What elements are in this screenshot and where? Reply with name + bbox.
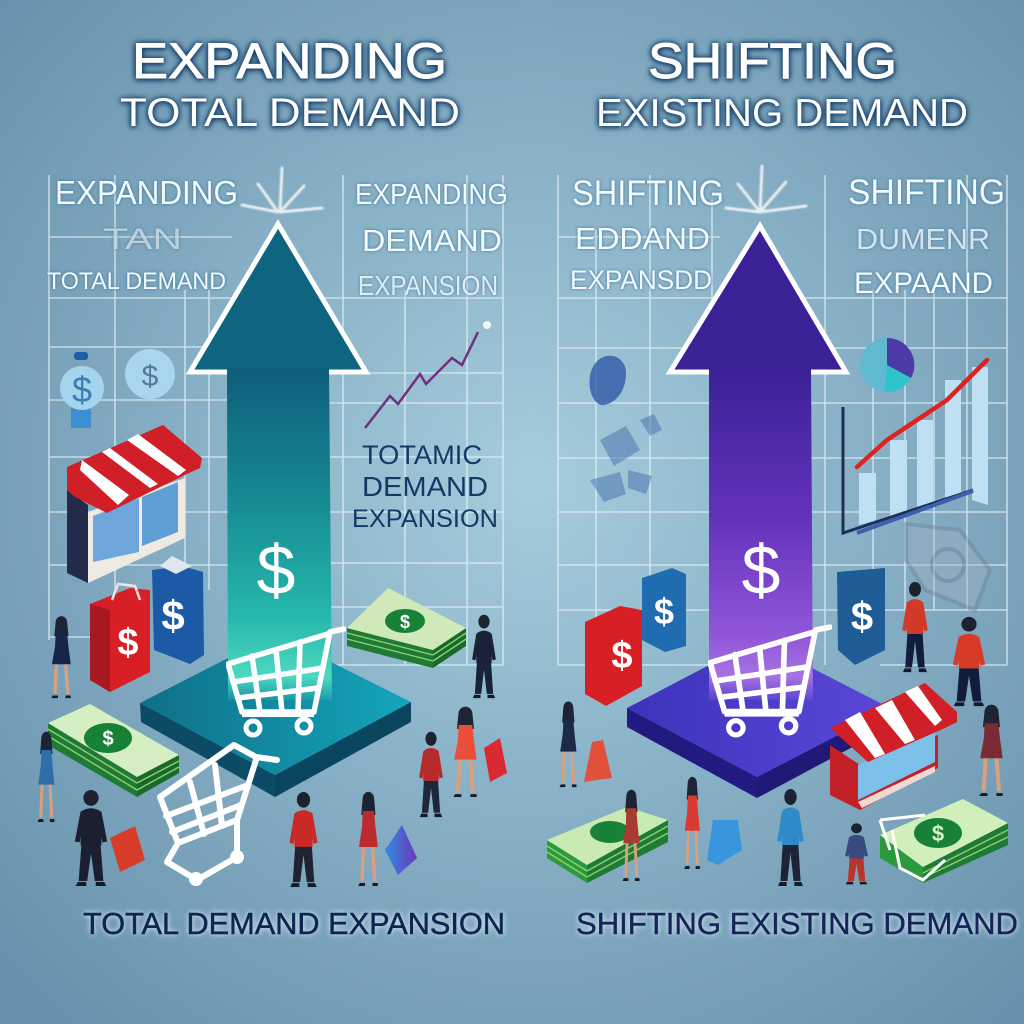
grid lines left xyxy=(49,175,1007,665)
text totamic demand expansion xyxy=(352,440,498,533)
title: shifting existing demand: EXISTING DEMAND xyxy=(596,92,968,135)
dollar signs on arrows xyxy=(257,531,780,609)
shifting panel labels: EDDAND xyxy=(575,221,710,256)
left cart large xyxy=(160,745,277,883)
faint icons right xyxy=(589,356,662,502)
icon: coin figure xyxy=(60,352,104,428)
bags left xyxy=(90,556,204,692)
left panel labels: TOTAL DEMAND xyxy=(47,268,226,295)
caption left: TOTAL DEMAND EXPANSION xyxy=(83,906,505,941)
bags left: $ xyxy=(161,592,185,639)
text totamic demand expansion: DEMAND xyxy=(362,471,488,502)
bags left: $ xyxy=(117,622,139,664)
shifting panel labels: SHIFTING xyxy=(572,174,724,213)
cash stack top xyxy=(347,588,466,668)
left panel labels xyxy=(47,174,238,295)
bags right: $ xyxy=(654,591,674,632)
carts on arrows xyxy=(228,627,830,735)
title: expanding total demand: TOTAL DEMAND xyxy=(120,91,460,135)
right-of-arrow labels right: DUMENR xyxy=(856,224,990,256)
platform right xyxy=(627,640,890,798)
bags right xyxy=(585,568,885,706)
shoppers left xyxy=(38,615,507,887)
dollar signs on arrows: $ xyxy=(257,531,295,609)
arrow right xyxy=(670,226,846,700)
cash stack top: $ xyxy=(400,612,410,632)
faint ghost icon xyxy=(906,524,990,610)
shifting panel labels: EXPANSDD xyxy=(570,265,712,295)
caption right: SHIFTING EXISTING DEMAND xyxy=(576,906,1018,941)
right-of-arrow labels right: SHIFTING xyxy=(848,173,1005,212)
right-of-arrow labels left: EXPANSION xyxy=(358,270,498,301)
shoppers right xyxy=(560,582,1003,886)
store right xyxy=(830,683,957,810)
left panel labels: TAN xyxy=(103,223,182,256)
icon: coin xyxy=(125,349,175,399)
cash stack right lower right: $ xyxy=(932,821,944,846)
dollar signs on arrows: $ xyxy=(742,531,780,609)
bags right: $ xyxy=(611,635,633,677)
cash stack right lower right xyxy=(880,799,1008,883)
right-of-arrow labels left xyxy=(355,179,508,301)
text totamic demand expansion: EXPANSION xyxy=(352,505,498,533)
title: shifting existing demand xyxy=(596,33,968,135)
left panel labels: EXPANDING xyxy=(55,174,238,211)
pie icon xyxy=(860,338,914,392)
text totamic demand expansion: TOTAMIC xyxy=(362,440,482,470)
right-of-arrow labels left: EXPANDING xyxy=(355,179,508,211)
sparkle left xyxy=(242,168,322,212)
title: expanding total demand: EXPANDING xyxy=(132,33,447,89)
platform left xyxy=(140,634,411,797)
bar chart right xyxy=(843,360,988,533)
icon: coin figure: $ xyxy=(72,369,92,410)
cash stack left xyxy=(48,704,179,797)
title: shifting existing demand: SHIFTING xyxy=(648,33,897,89)
bags right: $ xyxy=(851,595,873,639)
title: expanding total demand xyxy=(120,33,460,135)
cash stack left: $ xyxy=(102,728,114,750)
icon: coin: $ xyxy=(142,360,159,393)
right-of-arrow labels left: DEMAND xyxy=(362,223,502,258)
arrow left xyxy=(190,224,366,700)
mini line chart left xyxy=(365,321,491,428)
shifting panel labels xyxy=(570,174,724,295)
right-of-arrow labels right: EXPAAND xyxy=(854,267,993,300)
right-of-arrow labels right xyxy=(848,173,1005,300)
store left xyxy=(67,425,202,583)
cash stack right lower left xyxy=(547,807,668,883)
sparkle right xyxy=(726,166,806,212)
